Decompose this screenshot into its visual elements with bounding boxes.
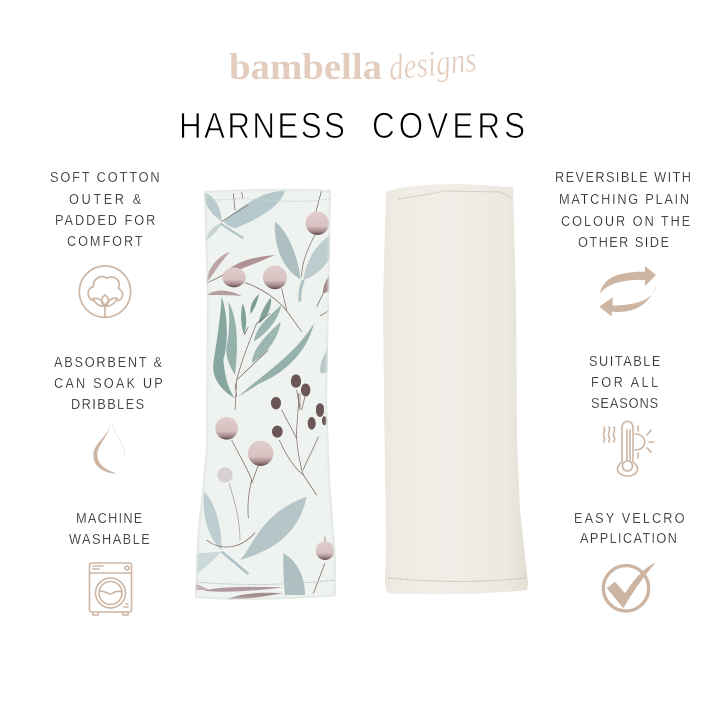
icon: reverse arrows <box>599 266 656 317</box>
cover fabric <box>195 189 336 600</box>
text block: machine washable <box>69 509 150 547</box>
text block: absorbent <box>54 353 163 412</box>
icon: thermometer and sun <box>603 421 654 476</box>
text block: all seasons: SUITABLE <box>589 352 660 369</box>
text block: reversible: REVERSIBLE WITH <box>555 168 691 185</box>
text block: absorbent: DRIBBLES <box>71 395 144 412</box>
bottom stitching <box>197 580 335 584</box>
text block: soft cotton <box>50 168 160 249</box>
icon: water drop <box>93 422 125 474</box>
text block: velcro <box>574 509 685 546</box>
top stitching <box>398 191 511 199</box>
bottom stitching <box>388 578 526 581</box>
fabric edge shading <box>195 189 336 600</box>
text block: all seasons: FOR ALL <box>591 373 658 390</box>
floral print <box>195 189 336 600</box>
text block: soft cotton: SOFT COTTON <box>50 168 160 185</box>
title <box>179 106 525 147</box>
brand logo <box>229 39 478 88</box>
text block: soft cotton: PADDED FOR <box>55 211 155 228</box>
check circle <box>603 566 649 611</box>
icon: washing machine <box>90 563 132 615</box>
print: lower section <box>195 378 334 599</box>
icon: check mark <box>603 562 656 611</box>
logo wordmark: bambella: bambella <box>229 47 382 88</box>
text block: absorbent: ABSORBENT & <box>54 353 163 370</box>
text block: reversible <box>555 168 691 250</box>
logo script: designs: designs <box>387 39 478 88</box>
text block: soft cotton: COMFORT <box>67 232 143 249</box>
text block: machine washable: WASHABLE <box>69 530 150 547</box>
text block: velcro: APPLICATION <box>580 529 677 546</box>
print: upper section <box>204 190 333 413</box>
text block: all seasons <box>589 352 660 411</box>
icon: cotton plant <box>79 266 131 317</box>
title: COVERS <box>372 106 525 147</box>
text block: reversible: COLOUR ON THE <box>561 212 690 229</box>
infographic canvas <box>50 52 690 616</box>
text block: machine washable: MACHINE <box>76 509 142 526</box>
plain fabric <box>383 184 528 594</box>
text block: absorbent: CAN SOAK UP <box>54 374 163 391</box>
text block: velcro: EASY VELCRO <box>574 509 685 526</box>
text block: all seasons: SEASONS <box>591 394 658 411</box>
top stitching <box>206 196 330 201</box>
text block: reversible: MATCHING PLAIN <box>559 190 689 207</box>
panel: plain harness cover <box>383 184 528 594</box>
text block: reversible: OTHER SIDE <box>578 233 669 250</box>
text block: soft cotton: OUTER & <box>69 190 142 207</box>
panel: patterned harness cover <box>195 189 336 600</box>
check tick <box>607 562 656 608</box>
title: HARNESS <box>179 106 345 147</box>
